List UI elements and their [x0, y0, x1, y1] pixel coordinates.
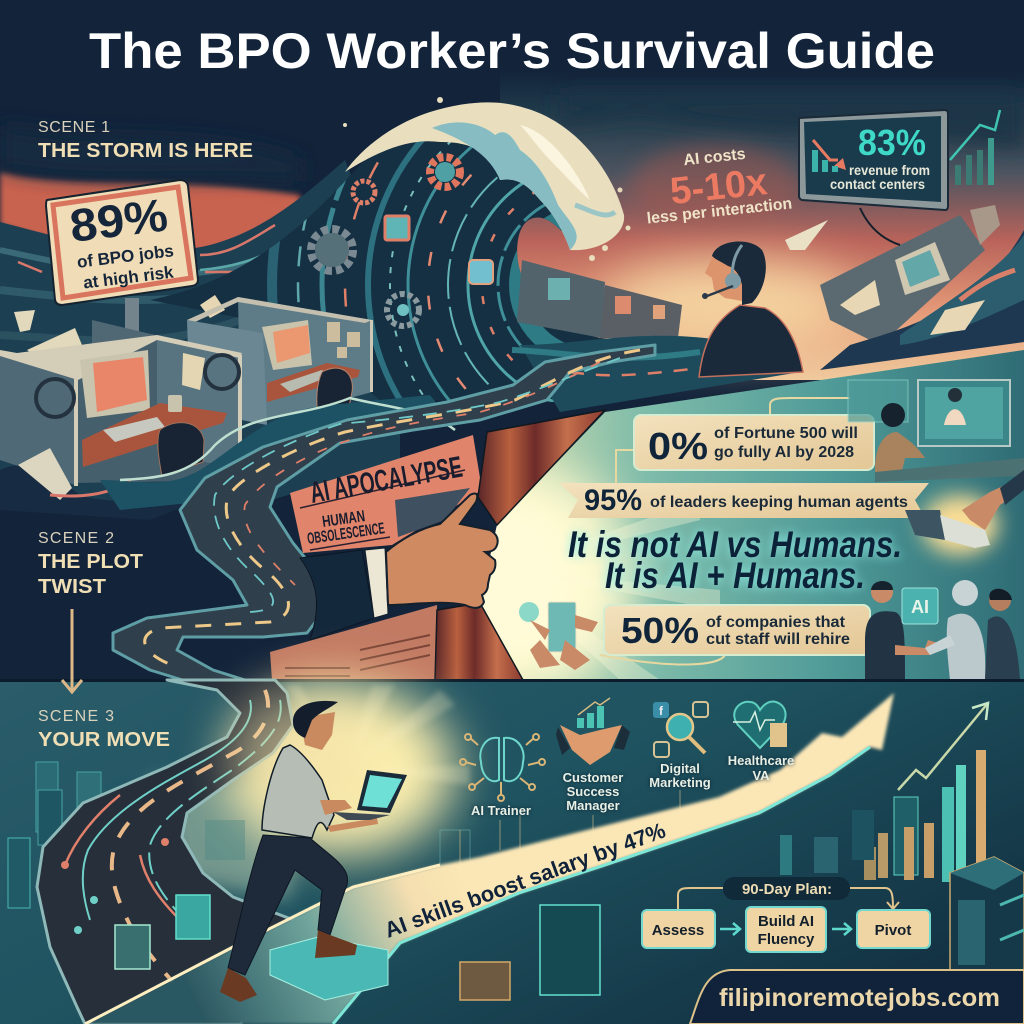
callout: 50 percent rehire: 50%: [621, 610, 699, 651]
text: scene 3 heading: [38, 708, 170, 751]
illustration: businessman, AI hologram, robot, businesswoman: [865, 580, 1020, 680]
illustration: hand pulling curtain: [300, 494, 498, 640]
callout: 0 percent of Fortune 500: 0%: [648, 426, 708, 468]
icon: wave foam crest: [343, 97, 630, 261]
box: Assess: [642, 910, 715, 948]
callout: 83 percent monitor: contact centers: [830, 177, 925, 192]
icon: brain AI trainer: [460, 734, 545, 801]
illustration: human and robot handshake: [905, 470, 1024, 555]
callout: AI costs 5-10x: 5-10x: [668, 161, 769, 213]
icon: gears and robot chips in wave: [311, 157, 493, 326]
callout: 95 percent ribbon: 95%: [584, 484, 642, 517]
text: AI plus humans statement: It is AI + Humans.: [605, 555, 865, 596]
panel: scene 1 storm background: [0, 70, 1024, 510]
text: scene 1 heading: THE STORM IS HERE: [38, 140, 253, 162]
arrow: scene 2 to scene 3: [62, 609, 82, 692]
box: Pivot: Pivot: [875, 922, 911, 939]
callout: AI costs 5-10x: less per interaction: [646, 195, 793, 228]
callout: 0 percent of Fortune 500: [616, 398, 874, 483]
text: Healthcare VA: VA: [752, 768, 770, 783]
text: Healthcare VA: [728, 753, 794, 783]
box: Pivot: [857, 910, 930, 948]
callout: 50 percent rehire: of companies that: [706, 614, 846, 631]
text: Human Obsolescence: OBSOLESCENCE: [306, 520, 386, 548]
text: Human Obsolescence: [306, 508, 386, 548]
callout: AI costs 5-10x: [630, 145, 800, 228]
callout: 83 percent monitor: 83%: [858, 122, 926, 163]
icon: magnifier digital marketing: [653, 702, 708, 757]
text: scene 2 heading: THE PLOT: [38, 551, 143, 573]
footer: website banner: filipinoremotejobs.com: [719, 984, 1000, 1012]
illustration: man climbing with laptop: [220, 701, 407, 1002]
text: Customer Success Manager: Manager: [566, 798, 620, 813]
box: Build AI Fluency: [746, 907, 826, 952]
text: scene 2 heading: SCENE 2: [38, 530, 114, 547]
text: Customer Success Manager: Success: [567, 784, 619, 799]
text: Digital Marketing: Digital: [660, 761, 700, 776]
text: Customer Success Manager: [563, 770, 623, 813]
illustration: glowing cubes: [115, 895, 600, 1000]
text: Human Obsolescence: HUMAN: [321, 508, 366, 531]
callout: 0 percent of Fortune 500: go fully AI by 2028: [714, 444, 854, 461]
callout: 50 percent rehire: [600, 605, 870, 664]
illustration: tilted cubicles in storm on right: [785, 205, 1024, 370]
sign: 89 percent of BPO jobs: [46, 180, 198, 348]
text: AI hologram label: AI: [911, 597, 929, 617]
text: scene 3 heading: SCENE 3: [38, 708, 114, 725]
illustration: hands with tablet: [519, 602, 598, 670]
box: Assess: Assess: [652, 922, 704, 939]
text: scene 2 heading: TWIST: [38, 576, 106, 598]
arrow: build to pivot: [832, 923, 851, 935]
footer: website banner: [690, 970, 1024, 1024]
text: AI skills boost salary by 47 percent: AI skills boost salary by 47%: [381, 818, 669, 943]
illustration: road: [113, 345, 655, 700]
title: The BPO Worker’s Survival Guide: [89, 23, 935, 79]
box: Build AI Fluency: Build AI: [758, 913, 814, 930]
icon: heart and document healthcare: [733, 701, 787, 748]
illustration: agent at desk with video call: [848, 380, 1024, 482]
callout: AI costs 5-10x: AI costs: [683, 146, 746, 169]
text: scene 1 heading: [38, 119, 253, 162]
text: Digital Marketing: Marketing: [649, 775, 711, 790]
text: scene 3 heading: YOUR MOVE: [38, 729, 170, 751]
illustration: worker in headset: [699, 241, 803, 377]
text: 89 percent: 89%: [67, 188, 170, 252]
arrow: salary growth band: [85, 693, 894, 1024]
text: AI plus humans statement: It is not AI vs Humans.: [568, 524, 902, 565]
callout: 83 percent monitor: [799, 110, 948, 245]
illustration: lower wave bands: [512, 336, 800, 412]
callout: 95 percent ribbon: [559, 483, 929, 518]
text: Digital Marketing: [649, 761, 711, 790]
illustration: skyline on right: [780, 703, 1024, 1000]
text: AI plus humans statement: [568, 524, 902, 596]
text: scene 1 heading: SCENE 1: [38, 119, 110, 136]
box: Build AI Fluency: Fluency: [758, 931, 815, 948]
text: 90-Day Plan: 90-Day Plan:: [742, 881, 832, 898]
diagram: 90-day plan: [642, 877, 930, 952]
text: AI Trainer: AI Trainer: [471, 803, 531, 818]
callout: 50 percent rehire: cut staff will rehire: [706, 631, 850, 648]
text: scene 2 heading: [38, 530, 143, 598]
icon: 83 percent growth chart: [950, 110, 1000, 185]
arrow: assess to build: [720, 923, 740, 935]
illustration: road lower section: [37, 680, 370, 1024]
panel: scene 2 plot twist: [113, 345, 1024, 700]
callout: 83 percent monitor: revenue from: [849, 163, 930, 178]
text: of BPO jobs at high risk: at high risk: [82, 263, 175, 292]
illustration: headline newspaper: [270, 435, 482, 680]
text: AI APOCALYPSE headline: AI APOCALYPSE: [307, 451, 465, 510]
callout: 95 percent ribbon: of leaders keeping human agents: [650, 494, 908, 511]
illustration: submerged small cubicles: [517, 260, 682, 338]
text: of BPO jobs at high risk: [76, 241, 175, 292]
callout: 0 percent of Fortune 500: of Fortune 500 will: [714, 425, 858, 442]
text: of BPO jobs at high risk: of BPO jobs: [76, 241, 175, 272]
icon: magnifier digital marketing: f: [659, 704, 664, 718]
illustration: circuit wave: [150, 97, 630, 402]
illustration: red curtain: [435, 410, 605, 680]
illustration: city on left: [8, 762, 245, 908]
icon: handshake customer success: [556, 698, 630, 765]
illustration: flooded cubicles: [0, 295, 455, 520]
text: Healthcare VA: Healthcare: [728, 753, 794, 768]
text: Customer Success Manager: Customer: [563, 770, 623, 785]
panel: scene 3 background: [0, 679, 1024, 1024]
